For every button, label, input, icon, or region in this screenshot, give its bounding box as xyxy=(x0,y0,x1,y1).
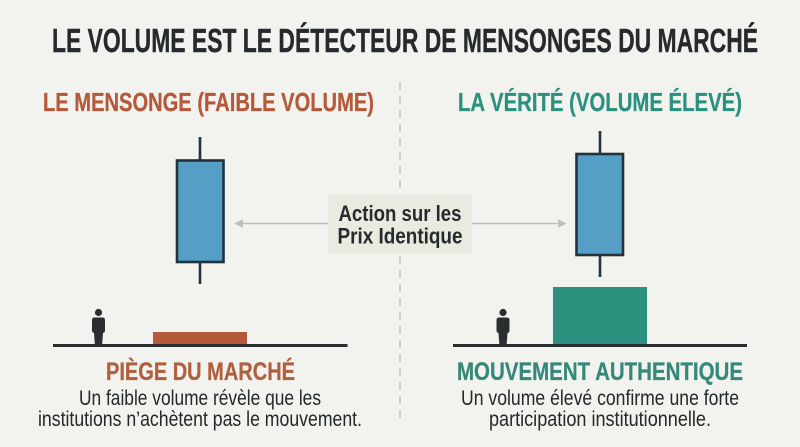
ground line xyxy=(453,344,747,347)
callout: identical price action xyxy=(236,194,565,254)
text: low volume explanation xyxy=(38,387,362,431)
text: high volume explanation: participation institutionnelle. xyxy=(489,408,711,431)
panel: the lie xyxy=(38,87,374,431)
callout text: Prix Identique xyxy=(338,224,462,248)
candlestick: high volume xyxy=(576,131,623,277)
text: high volume explanation: Un volume élevé confirme une forte xyxy=(461,387,739,410)
arrow: left xyxy=(236,220,328,226)
candlestick: low volume xyxy=(177,137,224,284)
callout box xyxy=(328,194,472,254)
text: low volume explanation: Un faible volume révèle que les xyxy=(79,387,321,410)
subheading: authentic move: MOUVEMENT AUTHENTIQUE xyxy=(457,358,743,386)
volume bar: high xyxy=(553,287,647,345)
heading: the lie: LE MENSONGE (FAIBLE VOLUME) xyxy=(43,87,374,117)
callout text: Action sur les xyxy=(338,201,462,226)
icon: person xyxy=(497,309,510,344)
icon: person xyxy=(92,309,105,344)
callout text xyxy=(338,201,462,248)
text: high volume explanation xyxy=(461,387,739,431)
panel: the truth xyxy=(453,87,747,431)
text: low volume explanation: institutions n’achètent pas le mouvement. xyxy=(38,408,362,431)
volume bar: low xyxy=(153,332,247,345)
ground line xyxy=(53,344,348,347)
arrow: right xyxy=(472,220,565,226)
subheading: market trap: PIÈGE DU MARCHÉ xyxy=(106,357,295,386)
